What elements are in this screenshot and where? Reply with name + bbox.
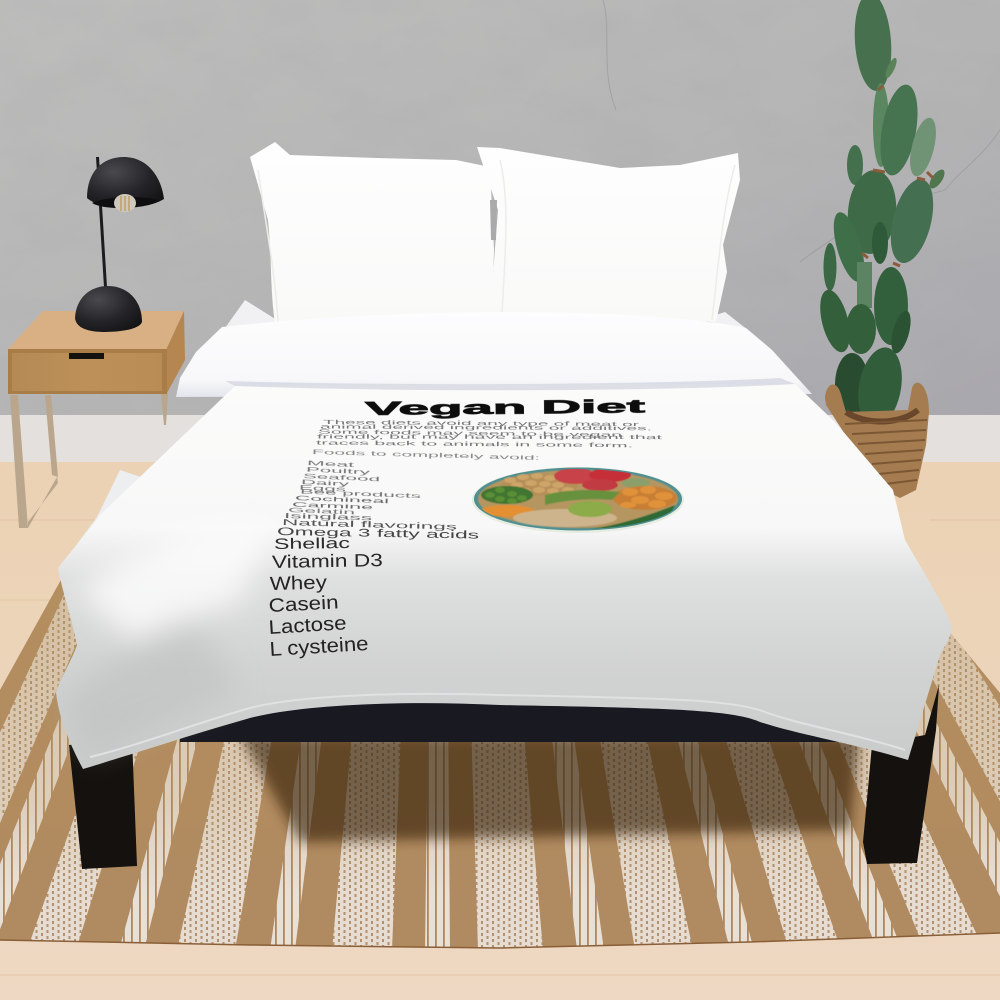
table side bbox=[166, 311, 185, 393]
foods list: Dairy bbox=[301, 480, 349, 488]
foods list: Poultry bbox=[306, 468, 370, 476]
foods list: Lactose bbox=[268, 612, 347, 639]
drawer front bbox=[8, 349, 167, 394]
foods list bbox=[268, 461, 480, 661]
spinach bbox=[590, 504, 676, 529]
foods list: Natural flavorings bbox=[282, 517, 457, 532]
edamame bbox=[481, 486, 533, 504]
bedside table bbox=[8, 311, 185, 528]
right pillow bbox=[477, 147, 740, 322]
bed frame bbox=[69, 685, 939, 869]
intro paragraph bbox=[316, 420, 663, 449]
warm tint on upper rug bbox=[0, 581, 1000, 862]
wall bbox=[0, 0, 1000, 416]
desk lamp bbox=[75, 157, 164, 332]
foods list: Isinglass bbox=[284, 513, 374, 522]
lamp shade bbox=[87, 157, 164, 207]
striped rug bbox=[0, 560, 1000, 950]
chickpeas bbox=[502, 473, 578, 496]
foods list: Whey bbox=[270, 572, 328, 595]
foods list: Omega 3 fatty acids bbox=[277, 526, 480, 542]
foods list: Meat bbox=[307, 461, 355, 469]
orange squash bbox=[480, 505, 534, 517]
intro paragraph: friendly, but may have an ingredient that bbox=[317, 435, 663, 441]
avocado bbox=[568, 501, 612, 517]
drawer handle bbox=[69, 353, 104, 359]
foods list: Carmine bbox=[292, 502, 374, 511]
side rail bbox=[180, 703, 905, 742]
foods list: Shellac bbox=[274, 535, 351, 553]
light bulb bbox=[114, 194, 136, 212]
left bed leg bbox=[69, 738, 137, 869]
lamp base bbox=[75, 286, 142, 332]
right bed leg bbox=[863, 685, 939, 864]
narrow rug stripes bbox=[0, 702, 1000, 947]
foods list: Vitamin D3 bbox=[272, 550, 383, 572]
table legs bbox=[10, 393, 168, 528]
foods list: Cochineal bbox=[295, 495, 391, 505]
blanket folds bbox=[60, 529, 270, 755]
green beans bbox=[545, 490, 620, 505]
blanket bbox=[56, 378, 952, 769]
blanket body bbox=[56, 384, 952, 769]
foods list: Eggs bbox=[299, 486, 346, 494]
blanket hem bbox=[90, 694, 905, 757]
foods list: Bee products bbox=[300, 489, 423, 500]
title: Vegan Diet bbox=[365, 397, 645, 419]
rug edge bbox=[0, 933, 1000, 948]
duvet fold shadow bbox=[225, 378, 795, 390]
pillow gap shadow bbox=[490, 200, 497, 240]
cactus joints bbox=[862, 86, 933, 266]
foods list: L cysteine bbox=[269, 633, 369, 661]
intro paragraph: Some foods may seem to be vegan bbox=[318, 430, 622, 439]
table top bbox=[8, 311, 184, 350]
cactus pads bbox=[815, 0, 947, 430]
sweet potato bbox=[613, 486, 677, 510]
wide rug stripes bbox=[0, 560, 1000, 950]
wooden floor bbox=[0, 462, 1000, 1000]
back sheet bbox=[225, 300, 748, 330]
baseboard bbox=[0, 415, 1000, 462]
grains bbox=[513, 509, 617, 527]
intro paragraph: animal derived ingredients or additives. bbox=[320, 425, 653, 432]
left pillow bbox=[250, 142, 494, 324]
potted cactus bbox=[815, 0, 947, 498]
lamp stem bbox=[96, 157, 107, 287]
foods list: Seafood bbox=[303, 474, 380, 483]
duvet bbox=[176, 312, 812, 397]
blanket side fold bbox=[60, 470, 150, 600]
foods list: Casein bbox=[268, 592, 339, 617]
shadow under bed bbox=[240, 735, 860, 842]
woven basket bbox=[825, 383, 929, 498]
intro paragraph: These diets avoid any type of meat or bbox=[323, 420, 639, 428]
intro paragraph: traces back to animals in some form. bbox=[316, 441, 634, 449]
list heading: Foods to completely avoid: bbox=[312, 449, 541, 462]
food bowl bbox=[472, 467, 684, 534]
printed design bbox=[268, 397, 684, 661]
foods list: Gelatin bbox=[288, 507, 356, 516]
tomatoes bbox=[554, 468, 596, 484]
